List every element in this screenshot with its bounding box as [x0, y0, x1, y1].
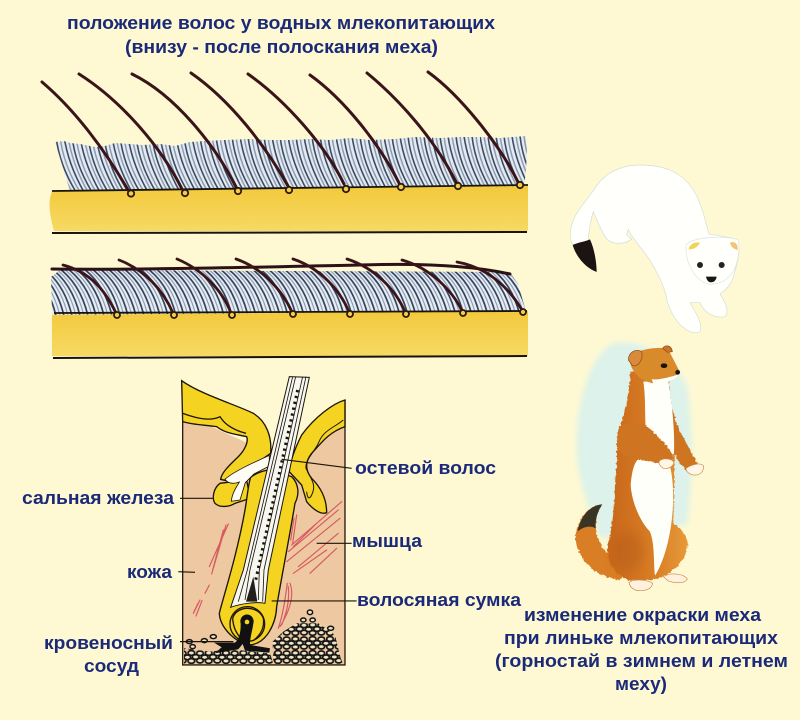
follicle sheath — [219, 470, 298, 645]
illustration: ermine in summer coat — [576, 343, 703, 591]
front paws — [659, 459, 674, 469]
right ear — [663, 346, 672, 352]
label: blood vessel: кровеносный — [44, 632, 173, 653]
right epidermis — [289, 400, 345, 513]
cheek white — [652, 374, 678, 384]
hair roots — [128, 182, 523, 197]
skin surface line — [52, 185, 528, 191]
skin base line — [53, 356, 527, 358]
hair medulla — [255, 390, 298, 583]
caption: moulting colour change: изменение окраски меха — [524, 604, 762, 625]
winter body — [570, 165, 739, 333]
right epidermis inner fold — [306, 420, 343, 498]
follicle base arc — [233, 608, 264, 641]
eyes — [697, 262, 725, 268]
skin block — [183, 410, 345, 665]
label: sebaceous gland: сальная железа — [22, 487, 175, 508]
caption: moulting colour change: (горностай в зимнем и летнем — [495, 650, 788, 671]
head — [629, 348, 680, 383]
skin strip — [52, 311, 528, 356]
left arm — [617, 422, 674, 464]
right paw — [686, 464, 703, 475]
title: (внизу - после полоскания меха) — [125, 36, 438, 57]
eye — [661, 363, 667, 368]
label: guard hair: остевой волос — [355, 457, 496, 478]
left epidermis — [182, 381, 271, 482]
white belly — [631, 458, 673, 576]
diagram: hair follicle in skin — [178, 377, 357, 665]
caption: moulting colour change — [495, 604, 788, 694]
tail — [576, 504, 628, 580]
title: положение волос у водных млекопитающих — [67, 12, 496, 33]
head — [686, 237, 739, 284]
ears — [688, 242, 700, 249]
pale blue background — [577, 343, 692, 538]
scattered cells — [186, 610, 334, 649]
block outline — [183, 382, 345, 665]
tail tip — [573, 239, 597, 272]
ears — [628, 350, 642, 366]
hair root bulb — [230, 607, 265, 641]
hind paws — [629, 580, 653, 591]
label: hair follicle: волосяная сумка — [357, 589, 522, 610]
cell layer bottom left — [184, 648, 273, 664]
left epidermis inner fold — [183, 413, 246, 433]
label: skin: кожа — [127, 561, 173, 582]
label: muscle: мышца — [352, 530, 423, 551]
skin strip — [50, 186, 528, 231]
title — [67, 12, 496, 57]
skin surface line — [54, 311, 527, 313]
gland duct — [225, 455, 269, 501]
white chest and belly — [643, 382, 674, 455]
cell pile bottom right — [273, 623, 343, 664]
haunch shading — [612, 532, 644, 572]
body orange — [607, 372, 688, 581]
underfur — [55, 136, 527, 191]
sebaceous gland bulb — [213, 480, 250, 506]
body fur — [607, 372, 698, 581]
hair shaft — [231, 377, 309, 607]
labels: diagram — [22, 457, 522, 676]
muscle fibres — [193, 502, 342, 628]
caption: moulting colour change: меху) — [615, 673, 667, 694]
caption: moulting colour change: при линьке млекопитающих — [504, 627, 779, 648]
blood vessel and papilla — [214, 615, 270, 653]
guard hairs — [63, 259, 522, 313]
flattened top hair line — [52, 264, 510, 274]
right hind paw — [663, 574, 687, 583]
tail dark tip — [577, 504, 602, 532]
leader lines — [178, 459, 357, 642]
skin base line — [52, 232, 527, 233]
flattened underfur — [51, 270, 525, 315]
illustration: ermine in winter coat — [570, 165, 739, 333]
label: blood vessel: сосуд — [84, 655, 139, 676]
right ear — [730, 242, 738, 250]
hair roots — [114, 309, 526, 318]
nose — [706, 277, 717, 282]
panel: dry fur cross-section — [42, 72, 528, 233]
nose — [675, 370, 680, 375]
guard hairs — [42, 72, 518, 190]
label: blood vessel — [44, 632, 173, 676]
panel: wet fur cross-section — [51, 259, 528, 358]
right arm — [667, 380, 698, 470]
